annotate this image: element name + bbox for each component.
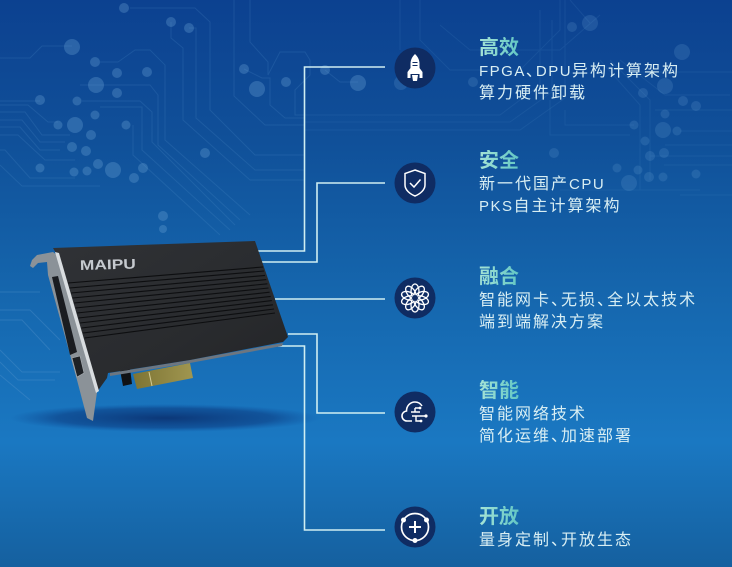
feature: 智能: 简化运维、加速部署	[479, 428, 633, 444]
feature: 高效	[479, 37, 680, 102]
feature: 安全: PKS自主计算架构	[479, 198, 622, 214]
icon: rocket	[394, 48, 436, 88]
feature: 开放: 量身定制、开放生态	[479, 532, 633, 549]
feature: 融合	[479, 266, 697, 330]
feature: 融合: 智能网卡、无损、全以太技术	[479, 292, 697, 309]
dark connector strip	[52, 276, 77, 355]
feature: 开放	[479, 506, 633, 549]
gold fingers	[133, 363, 193, 389]
feature: 融合: 融合	[479, 266, 519, 288]
silver edge	[55, 252, 99, 393]
feature: 融合: 端到端解决方案	[479, 314, 605, 330]
icon: flower atom	[394, 278, 436, 318]
network card	[30, 241, 288, 421]
card shadow	[10, 404, 320, 432]
MAIPU logo: MAIPU	[80, 256, 136, 273]
icon: shield check	[394, 162, 436, 204]
feature: 开放: 开放	[479, 506, 519, 528]
feature: 高效: 算力硬件卸载	[479, 84, 587, 102]
feature: 安全: 新一代国产CPU	[479, 176, 605, 193]
feature: 安全: 安全	[479, 150, 519, 172]
grey lower edge	[110, 343, 283, 376]
icon: circle plus	[394, 506, 436, 548]
feature: 智能: 智能	[479, 380, 519, 402]
feature: 高效: FPGA、DPU异构计算架构	[479, 63, 680, 80]
heatsink ridges	[68, 267, 275, 338]
icon: cloud network	[394, 392, 436, 432]
feature: 智能: 智能网络技术	[479, 406, 587, 423]
black key tab	[120, 368, 132, 386]
feature: 安全	[479, 150, 622, 214]
card body	[53, 241, 288, 392]
feature: 智能	[479, 380, 633, 444]
RJ45 port	[72, 356, 84, 377]
feature: 高效: 高效	[479, 37, 519, 59]
metal bracket	[30, 252, 97, 421]
connector lines	[255, 67, 385, 530]
